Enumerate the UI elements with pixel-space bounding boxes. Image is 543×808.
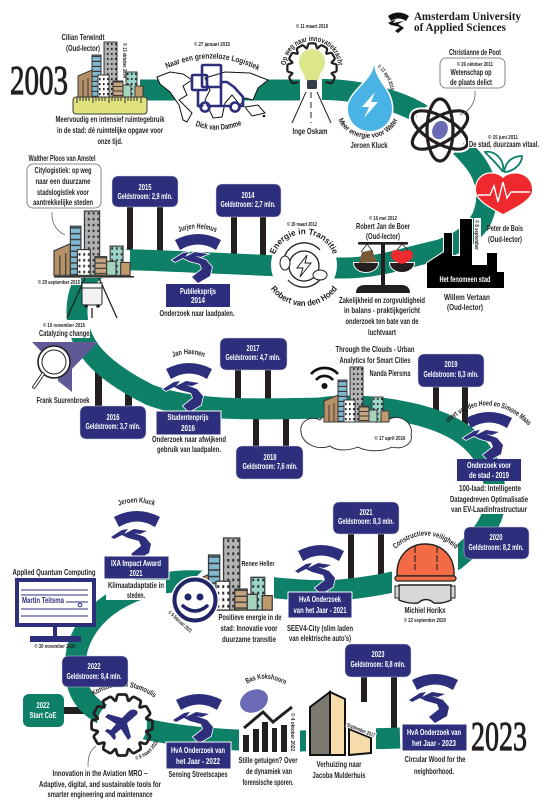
award: Studentenprijs 2016	[152, 348, 226, 454]
funding box 2017: 2017	[246, 343, 260, 353]
milestone box 2022 Start CoE: Start CoE	[30, 710, 57, 720]
entry: Stille getuigen with fingerprint and chart: © 4 oktober 2022	[289, 713, 296, 751]
award: HvA Onderzoek 2022: het Jaar - 2022	[176, 756, 220, 766]
entry: Cilian Terwindt: Meervoudig en intensief ruimtegebruik	[56, 114, 165, 124]
entry: Robert Jan de Boer: (Oud-lector)	[366, 231, 400, 241]
entry: Op weg naar innovatiekracht: Inge Oskam	[292, 126, 328, 136]
milestone box 2022 Start CoE: 2022	[36, 700, 50, 710]
callout: Walther Ploos van Amstel: Citylogistiek: op weg	[34, 165, 92, 175]
title year 2003: 2003	[10, 57, 68, 103]
entry: Constructieve veiligheid: © 22 september 2020	[404, 617, 446, 624]
entry: Positieve energie in de stad: Positieve energie in de	[218, 612, 282, 622]
award: Studentenprijs 2016: Studentenprijs	[168, 412, 209, 422]
award: Publieksprijs 2014: Jurjen Helmus	[178, 223, 217, 232]
entry: Through the Clouds: Nanda Piersma	[370, 368, 411, 378]
entry: city with drone camera: © 29 september 2015	[38, 279, 80, 286]
entry: Constructieve veiligheid: Michiel Horikx	[404, 605, 446, 615]
icon: balance scale	[354, 242, 414, 293]
logo: Amsterdam University of Applied Sciences: Amsterdam University	[414, 11, 521, 23]
entry: city with drone camera	[38, 211, 134, 318]
award: Publieksprijs 2014: 2014	[191, 295, 205, 305]
icon: Energie in Transitie circle: © 19 maart 2012	[287, 221, 317, 228]
entry: Cilian Terwindt: Cilian Terwindt	[62, 32, 105, 42]
award: HvA Onderzoek 2021: van het Jaar - 2021	[294, 605, 347, 615]
award: Studentenprijs 2016: Jan Haenen	[172, 348, 205, 357]
funding box 2020: 2020	[490, 532, 503, 542]
award: IXA Impact Award 2021: IXA Impact Award	[111, 558, 161, 568]
funding box 2015	[112, 176, 178, 207]
funding box 2016	[80, 406, 146, 439]
icon: Energie in Transitie circle	[270, 221, 338, 306]
icon: light bulb in gear	[287, 43, 337, 123]
entry: De stad, duurzaam vitaal with apple: (Oud-lector)	[488, 234, 522, 244]
entry: Through the Clouds: Analytics for Smart Cities	[340, 355, 411, 365]
entry: Robert Jan de Boer: onderzoek ten bate van de	[346, 316, 419, 326]
award: HvA Onderzoek 2023: Circular Wood for the	[404, 754, 466, 764]
award: HvA Onderzoek 2022: Sensing Streetscapes	[168, 769, 228, 779]
entry: Stille getuigen with fingerprint and chart	[238, 673, 300, 787]
funding box 2014	[216, 184, 281, 217]
entry: Konstantinos Stamoulis: Adaptive, digital, and sustainable tools for	[39, 779, 161, 789]
award: IXA Impact Award 2021	[104, 497, 170, 600]
entry: Konstantinos Stamoulis: smarter engineering and maintenance	[48, 789, 153, 799]
award: Studentenprijs 2016: 2016	[181, 423, 195, 433]
entry: Op weg naar innovatiekracht: © 11 maart 2019	[296, 23, 328, 30]
callout: Walther Ploos van Amstel: aantrekkelijke steden	[33, 197, 93, 207]
funding box 2019	[418, 354, 484, 387]
award: Onderzoek voor de stad 2019: de stad - 2019	[469, 470, 509, 480]
entry: Konstantinos Stamoulis: © 9 maart 2022	[135, 740, 158, 760]
icon: Energie in Transitie circle: Energie in Transitie	[270, 228, 337, 254]
award: HvA Onderzoek 2021	[287, 545, 353, 643]
entry: Positieve energie in de stad: Renee Heller	[242, 559, 275, 568]
funding box 2018: 2018	[264, 452, 277, 462]
award: HvA Onderzoek 2023: het Jaar - 2023	[412, 738, 456, 748]
funding box 2015: 2015	[138, 182, 152, 192]
logo: Amsterdam University of Applied Sciences: of Applied Sciences	[414, 22, 507, 34]
funding box 2022	[62, 656, 128, 687]
funding box 2015: Geldstroom: 2,9 mln.	[118, 191, 172, 201]
entry: Robert Jan de Boer: luchtvaart	[368, 327, 396, 337]
entry: Constructieve veiligheid	[392, 530, 459, 624]
entry: Cilian Terwindt	[56, 32, 165, 146]
entry: Positieve energie in de stad: stad: Innovatie voor	[220, 623, 278, 633]
entry: Through the Clouds	[301, 344, 414, 451]
funding box 2017: Geldstroom: 4,7 mln.	[226, 352, 280, 362]
posts: funding bars	[64, 207, 468, 733]
award: HvA Onderzoek 2023: neighborhood.	[414, 766, 454, 776]
entry: Op weg naar innovatiekracht: Op weg naar innovatiekracht	[280, 36, 343, 66]
entry: Robert Jan de Boer: © 16 mei 2012	[369, 215, 397, 222]
entry: Op weg naar innovatiekracht	[280, 23, 343, 136]
award: Publieksprijs 2014: Onderzoek naar laadpalen.	[160, 308, 234, 318]
award: IXA Impact Award 2021: steden.	[127, 590, 145, 600]
entry: Verhuizing naar Jacoba Mulderhuis: Jacoba Mulderhuis	[312, 770, 366, 780]
funding box 2021	[333, 502, 399, 534]
entry: Positieve energie in de stad: duurzame transitie	[222, 634, 276, 644]
award: IXA Impact Award 2021: 2021	[130, 568, 143, 578]
entry: Verhuizing naar Jacoba Mulderhuis: September 2017	[346, 722, 376, 739]
entry: Stille getuigen with fingerprint and chart: de dynamiek van	[246, 766, 292, 776]
entry: Catalyzing change: Frank Suurenbroek	[36, 395, 90, 405]
funding box 2022: 2022	[88, 661, 101, 671]
entry: Catalyzing change: Catalyzing change.	[39, 328, 91, 338]
entry: Robert Jan de Boer: in balans - praktijkgericht	[344, 305, 420, 315]
entry: Robert Jan de Boer	[339, 215, 425, 337]
award: HvA Onderzoek 2023: HvA Onderzoek van	[407, 727, 461, 737]
entry: Through the Clouds: Through the Clouds - Urban	[336, 344, 414, 354]
funding box 2016: 2016	[106, 412, 120, 422]
icon: factory with Het fenomeen stad: Het fenomeen stad	[440, 274, 490, 284]
entry: Konstantinos Stamoulis	[39, 682, 161, 799]
funding box 2017	[220, 338, 287, 370]
award: HvA Onderzoek 2021: SEEV4-City (slim laden	[287, 623, 353, 633]
award: Publieksprijs 2014: Publieksprijs	[180, 286, 216, 296]
award: HvA Onderzoek 2021: van elektrische auto's)	[289, 633, 351, 643]
award: Publieksprijs 2014	[160, 223, 234, 318]
entry: Cilian Terwindt: (Oud-lector)	[66, 43, 100, 53]
award: Onderzoek voor de stad 2019: Onderzoek voor	[467, 460, 511, 470]
funding box 2023	[345, 644, 411, 677]
funding box 2014: 2014	[242, 190, 255, 200]
entry: Catalyzing change: © 10 november 2015	[43, 322, 85, 329]
entry: Constructieve veiligheid: Constructieve veiligheid	[392, 530, 459, 549]
callout: Christianne de Poot: Christianne de Poot	[449, 47, 501, 57]
award: HvA Onderzoek 2021: HvA Onderzoek	[299, 594, 341, 604]
icon: Energie in Transitie circle: Robert van den Hoed	[270, 285, 338, 306]
award: Studentenprijs 2016: Onderzoek naar afwijkend	[152, 434, 226, 444]
timeline road	[75, 89, 495, 741]
icon: monitor Applied Quantum Computing: Martin Teitsma	[22, 595, 64, 605]
entry: De stad, duurzaam vitaal with apple: © 15 juni 2011	[488, 134, 518, 141]
entry: Through the Clouds: © 17 april 2016	[374, 435, 406, 442]
entry: Naar een grenzeloze Logistiek: Naar een grenzeloze Logistiek	[165, 52, 260, 71]
entry: Catalyzing change	[32, 320, 98, 405]
entry: Verhuizing naar Jacoba Mulderhuis: Verhuizing naar	[316, 759, 362, 769]
award: IXA Impact Award 2021: Jeroen Kluck	[118, 497, 156, 506]
award: HvA Onderzoek 2022	[166, 694, 231, 779]
award: HvA Onderzoek 2022: HvA Onderzoek van	[171, 745, 225, 755]
entry: Meer energie voor Water	[338, 64, 398, 150]
icon: factory with Het fenomeen stad: Willem Vertaan	[444, 292, 490, 302]
funding box 2023: Geldstroom: 8,8 mln.	[350, 659, 406, 669]
entry: Verhuizing naar Jacoba Mulderhuis	[306, 692, 377, 780]
entry: De stad, duurzaam vitaal with apple	[468, 128, 540, 244]
icon: atom	[407, 99, 473, 161]
callout: Christianne de Poot: de plaats delict	[450, 77, 492, 87]
icon: world map and truck	[157, 65, 268, 122]
callout: Christianne de Poot	[440, 47, 505, 115]
funding box 2023: 2023	[372, 649, 385, 659]
icon: safety helmet and goggles	[392, 540, 458, 606]
icon: gear with airplane	[92, 695, 152, 755]
entry: Stille getuigen with fingerprint and chart: forensische sporen.	[242, 777, 294, 787]
award: Onderzoek voor de stad 2019	[446, 400, 531, 514]
logo: Amsterdam University of Applied Sciences	[388, 11, 521, 34]
award: IXA Impact Award 2021: Klimaatadaptatie in	[108, 580, 164, 590]
entry: De stad, duurzaam vitaal with apple: Peter de Bois	[487, 223, 523, 233]
icon: monitor Applied Quantum Computing: Applied Quantum Computing	[12, 567, 96, 577]
entry: Cilian Terwindt: in de stad: dé ruimtelijke opgave voor	[57, 125, 163, 135]
award: HvA Onderzoek 2023	[402, 674, 467, 776]
entry: Naar een grenzeloze Logistiek: © 27 januari 2015	[194, 41, 230, 48]
entry: Meer energie voor Water: Jeroen Kluck	[350, 140, 388, 150]
entry: Positieve energie in de stad: © 9 februari 2021	[167, 609, 193, 635]
milestone box 2022 Start CoE	[23, 694, 64, 727]
icon: monitor Applied Quantum Computing: © 30 november 2020	[34, 643, 76, 650]
funding box 2020	[464, 527, 529, 559]
funding box 2018: Geldstroom: 7,6 mln.	[242, 461, 298, 471]
award: Studentenprijs 2016: gebruik van laadpalen.	[157, 444, 221, 454]
funding box 2019: Geldstroom: 8,3 mln.	[424, 369, 478, 379]
callout: Walther Ploos van Amstel: naar een duurzame	[36, 176, 91, 186]
funding box 2014: Geldstroom: 2,7 mln.	[220, 199, 276, 209]
icon: factory with Het fenomeen stad	[427, 218, 504, 312]
funding box 2022: Geldstroom: 8,4 mln.	[66, 671, 122, 681]
entry: Konstantinos Stamoulis: Konstantinos Stamoulis	[91, 682, 156, 698]
icon: monitor Applied Quantum Computing	[12, 567, 96, 650]
funding box 2018	[236, 446, 303, 479]
icon: factory with Het fenomeen stad: (Oud-lector)	[447, 302, 483, 312]
entry: Naar een grenzeloze Logistiek	[165, 41, 260, 130]
entry: Stille getuigen with fingerprint and chart: Stille getuigen? Over	[238, 755, 298, 765]
entry: Stille getuigen with fingerprint and chart: Bas Kokshoorn	[245, 673, 286, 684]
entry: Meer energie voor Water: Meer energie voor Water	[338, 118, 398, 140]
award: Onderzoek voor de stad 2019: 100-laad: Intelligente	[459, 483, 521, 493]
entry: Robert Jan de Boer: Zakelijkheid en zorgvuldigheid	[339, 295, 425, 305]
callout: Walther Ploos van Amstel	[27, 153, 101, 235]
entry: Robert Jan de Boer: Robert Jan de Boer	[356, 221, 410, 231]
entry: Konstantinos Stamoulis: Innovation in the Aviation MRO –	[52, 768, 148, 778]
entry: Positieve energie in de stad	[167, 535, 282, 644]
funding box 2021: 2021	[360, 507, 373, 517]
icon: factory with Het fenomeen stad: © 8 september	[473, 220, 480, 251]
funding box 2021: Geldstroom: 8,3 mln.	[338, 516, 394, 526]
callout: Christianne de Poot: © 26 oktober 2011	[457, 61, 493, 68]
icon: water drop	[348, 65, 392, 131]
entry: Cilian Terwindt: © 13 oktober 2004	[121, 43, 128, 79]
entry: Cilian Terwindt: onze tijd.	[98, 136, 122, 146]
award: Onderzoek voor de stad 2019: Robert van den Hoed en Simone Maase	[446, 400, 531, 426]
callout: Walther Ploos van Amstel: Walther Ploos van Amstel	[28, 153, 96, 163]
funding box 2019: 2019	[444, 359, 458, 369]
funding box 2016: Geldstroom: 3,7 mln.	[86, 421, 140, 431]
callout: Walther Ploos van Amstel: stadslogistiek voor	[37, 187, 89, 197]
entry: Naar een grenzeloze Logistiek: Dick van Damme	[196, 120, 242, 130]
callout: Christianne de Poot: Wetenschap op	[450, 67, 492, 77]
entry: Meer energie voor Water: © 11 april 2010	[378, 64, 394, 90]
